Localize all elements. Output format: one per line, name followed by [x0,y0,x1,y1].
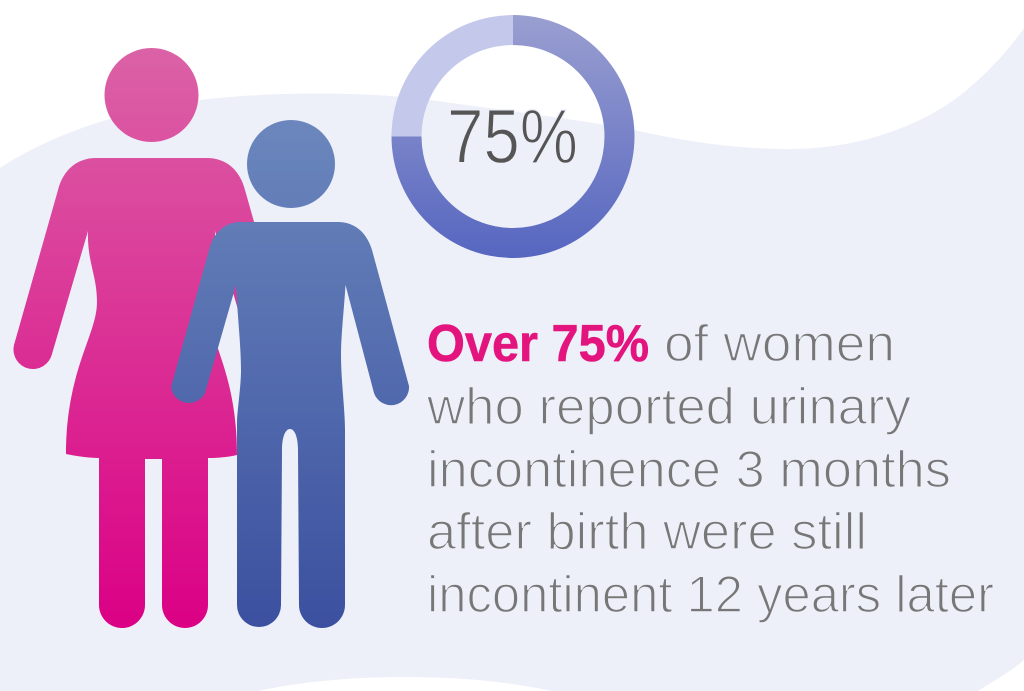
of women: of women [664,315,895,373]
text block: statistic [426,315,994,624]
donut chart: 75% [392,15,634,258]
line 5: incontinent 12 years later [427,566,994,624]
line 4: after birth were still [427,503,867,561]
icon: man figure [171,120,409,628]
line 2: who reported urinary [426,378,911,436]
donut label: 75% [447,94,578,180]
icon: woman figure [13,48,290,628]
highlight: Over 75%: Over 75% [427,315,649,373]
line 1 [427,315,895,373]
ring value: 75% [392,15,634,258]
line 3: incontinence 3 months [427,441,951,499]
ring remainder: 25% [392,15,513,136]
